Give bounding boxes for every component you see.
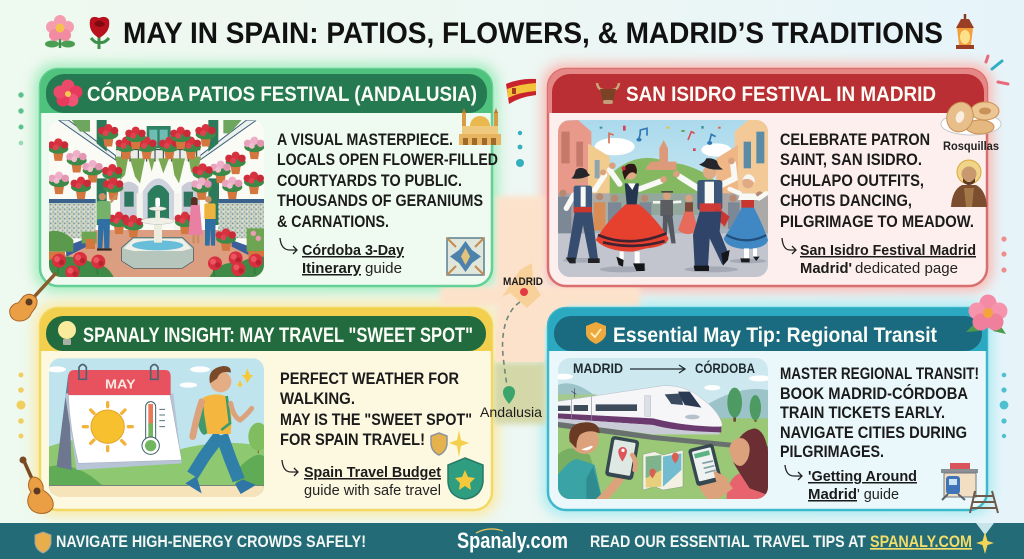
link text: Getting Around Madrid: ' guide xyxy=(857,486,899,503)
icon: footer shield xyxy=(35,532,51,553)
header text: CÓRDOBA PATIOS FESTIVAL (ANDALUSIA) xyxy=(87,81,477,106)
panel: Regional Transit tip xyxy=(548,308,987,510)
footer call to action: SPANALY.COM xyxy=(870,532,972,551)
route label: Madrid to Córdoba: MADRID xyxy=(573,360,623,376)
link arrow xyxy=(782,238,796,254)
panel text: PERFECT WEATHER FOR xyxy=(280,370,459,388)
link text: Córdoba itinerary: guide xyxy=(365,260,402,277)
footer bar xyxy=(0,523,1024,559)
link text: San Isidro page xyxy=(800,242,976,277)
route label: Madrid to Córdoba: CÓRDOBA xyxy=(695,359,755,376)
link text: Córdoba itinerary: Itinerary xyxy=(302,260,362,277)
link text: Getting Around Madrid xyxy=(808,468,917,503)
link arrow xyxy=(282,460,298,476)
illustration: calendar and walker: MAY xyxy=(105,377,136,391)
link text: budget guide: guide with safe travel xyxy=(304,482,441,499)
link text: budget guide xyxy=(304,464,441,499)
icon: mosque xyxy=(459,108,501,145)
link text: Córdoba itinerary: Córdoba 3-Day xyxy=(302,242,405,259)
decorative side dots teal right xyxy=(1000,373,1008,438)
link text: Getting Around Madrid: Madrid xyxy=(808,486,857,503)
link text: San Isidro page: San Isidro Festival Madrid xyxy=(800,242,976,259)
decorative side dots pink xyxy=(1001,236,1007,273)
illustration: calendar and walker xyxy=(47,358,268,498)
panel text: LOCALS OPEN FLOWER-FILLED xyxy=(277,151,498,169)
map route overlay xyxy=(480,263,543,420)
icon: saint xyxy=(951,160,987,207)
panel header xyxy=(46,74,487,113)
panel text xyxy=(780,365,979,461)
header text: Essential May Tip: Regional Transit xyxy=(613,323,937,347)
panel header xyxy=(552,74,984,113)
icon: red rose xyxy=(90,17,109,49)
decorative side dots teal xyxy=(516,131,524,167)
link text: budget guide: Spain Travel Budget xyxy=(304,464,441,481)
icon: railway tracks xyxy=(970,491,998,513)
icon: bull xyxy=(597,83,619,104)
icon: Spanish flag xyxy=(506,79,536,104)
icon: small shield and sparkle xyxy=(431,430,469,457)
icon: pink blossom xyxy=(966,294,1008,334)
icon: pink flower xyxy=(45,15,75,48)
link text: Córdoba itinerary xyxy=(302,242,405,277)
panel text xyxy=(280,370,472,449)
link text: Getting Around Madrid: 'Getting Around xyxy=(808,468,917,485)
Andalusia label: Andalusia xyxy=(480,404,542,420)
panel text: CELEBRATE PATRON xyxy=(780,131,930,149)
route label: Madrid to Córdoba xyxy=(573,359,755,376)
panel text: & CARNATIONS. xyxy=(277,213,389,231)
panel text: SAINT, SAN ISIDRO. xyxy=(780,151,922,169)
icon: train station xyxy=(941,463,978,500)
icon: lantern xyxy=(956,14,974,49)
title xyxy=(45,14,974,50)
panel text: BOOK MADRID-CÓRDOBA xyxy=(780,384,968,403)
railway pin tip xyxy=(976,523,994,535)
panel text: MASTER REGIONAL TRANSIT! xyxy=(780,365,979,383)
panel text: TRAIN TICKETS EARLY. xyxy=(780,404,945,422)
link text: San Isidro page: dedicated page xyxy=(855,260,958,277)
panel: San Isidro Festival xyxy=(548,69,987,286)
footer call to action: READ OUR ESSENTIAL TRAVEL TIPS AT xyxy=(590,532,867,551)
illustration: train and travellers xyxy=(553,355,773,503)
panel: Córdoba Patios Festival xyxy=(40,69,501,286)
Madrid marker xyxy=(520,288,528,296)
icon: light bulb xyxy=(58,321,76,345)
route dashed line xyxy=(503,302,520,392)
panel text: NAVIGATE CITIES DURING xyxy=(780,424,967,442)
panel text: PILGRIMAGE TO MEADOW. xyxy=(780,213,974,231)
decorative side dots yellow xyxy=(16,372,26,438)
decorative side dots green xyxy=(18,92,24,145)
illustration: chotis dancers xyxy=(553,115,773,280)
panel header xyxy=(554,316,982,351)
panel text: MAY IS THE "SWEET SPOT" xyxy=(280,411,472,429)
link arrow xyxy=(785,465,802,480)
icon: shield xyxy=(586,322,606,344)
illustration: flower-filled courtyard xyxy=(49,120,264,277)
panel text: THOUSANDS OF GERANIUMS xyxy=(277,192,483,210)
panel text: PILGRIMAGES. xyxy=(780,443,884,461)
Madrid label: MADRID xyxy=(503,276,543,288)
link text: San Isidro page: Madrid' xyxy=(800,260,852,277)
footer logo: Spanaly.com xyxy=(457,528,568,553)
icon: guitar bottom xyxy=(20,456,53,513)
Andalusia pin xyxy=(503,386,515,404)
header text: SAN ISIDRO FESTIVAL IN MADRID xyxy=(626,82,936,106)
panel text: WALKING. xyxy=(280,390,355,408)
panel: Spanaly Insight xyxy=(40,308,492,510)
icon: hibiscus xyxy=(54,80,82,106)
panel text: FOR SPAIN TRAVEL! xyxy=(280,431,425,449)
map of Spain background xyxy=(440,196,640,424)
panel text xyxy=(277,131,498,231)
icon: guitar top xyxy=(10,273,56,321)
footer safety message: NAVIGATE HIGH-ENERGY CROWDS SAFELY! xyxy=(56,532,366,551)
panel text: CHULAPO OUTFITS, xyxy=(780,172,924,190)
icon: footer sparkle xyxy=(976,532,994,554)
header text: SPANALY INSIGHT: MAY TRAVEL "SWEET SPOT" xyxy=(83,323,473,347)
icon: rosquillas plate xyxy=(941,98,1001,136)
panel text: COURTYARDS TO PUBLIC. xyxy=(277,172,462,190)
heading text: MAY IN SPAIN: PATIOS, FLOWERS, & MADRID’S TRADITIONS xyxy=(123,17,943,50)
icon: azulejo tile xyxy=(447,238,484,275)
panel header xyxy=(46,316,486,351)
panel text: CHOTIS DANCING, xyxy=(780,192,912,210)
panel text xyxy=(780,131,974,231)
panel text: A VISUAL MASTERPIECE. xyxy=(277,131,453,149)
icon: shield with star xyxy=(448,458,483,499)
Madrid region xyxy=(502,263,541,308)
link arrow xyxy=(280,238,297,254)
confetti accents xyxy=(986,56,1008,84)
rosquillas label: Rosquillas xyxy=(943,139,999,153)
